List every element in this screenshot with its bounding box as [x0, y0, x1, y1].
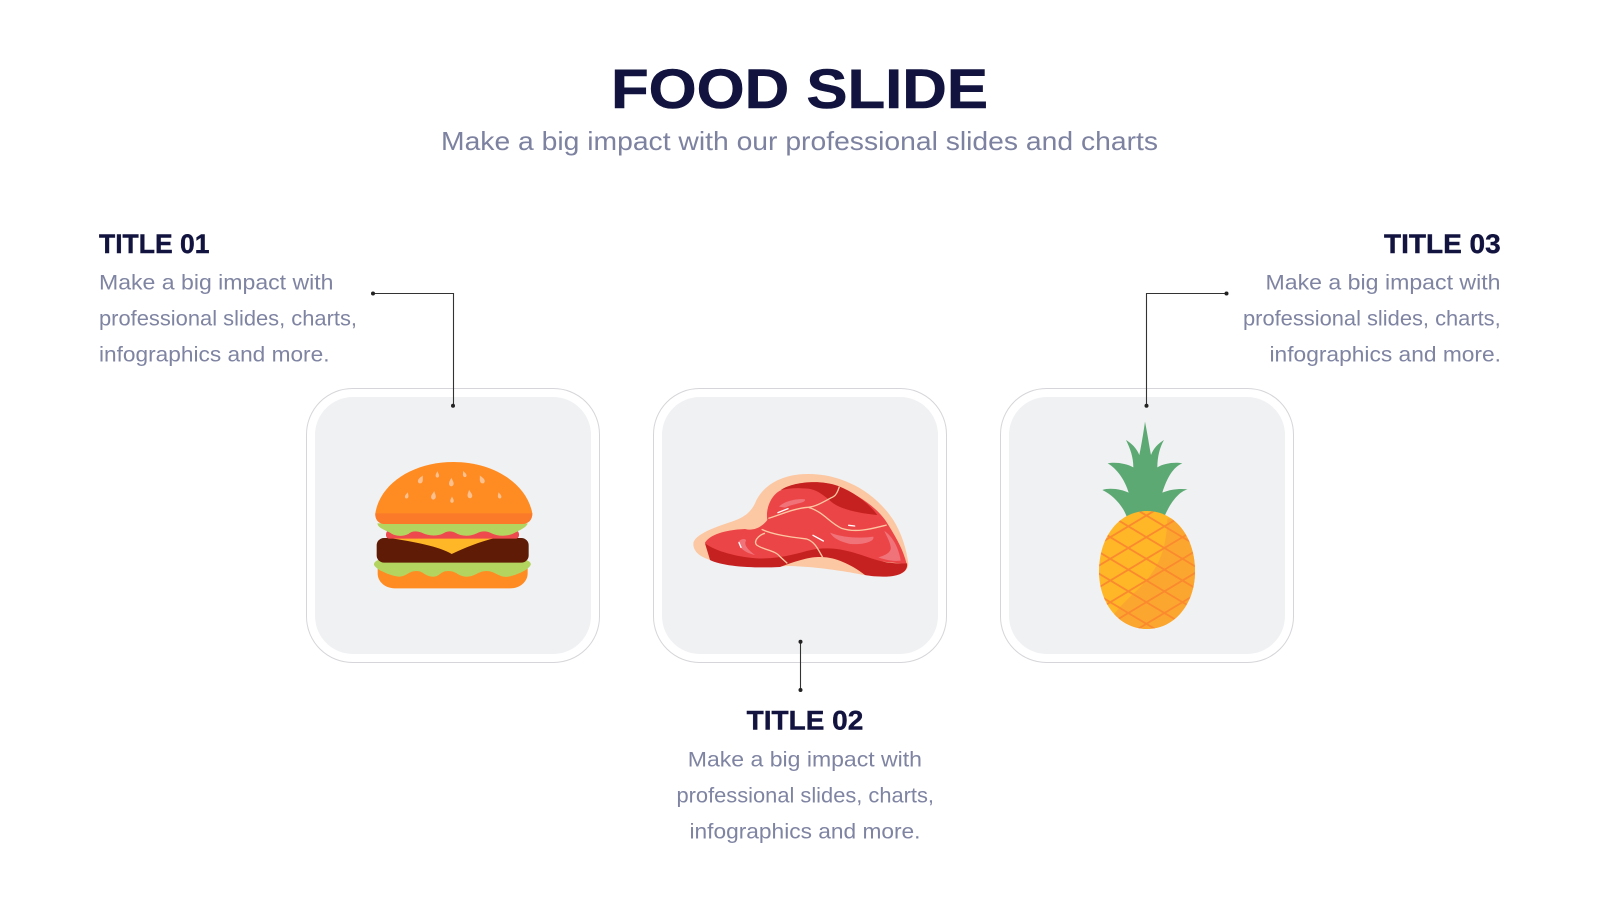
- panel: pineapple card: [1000, 388, 1294, 663]
- text block: title 01: infographics and more.: [99, 344, 330, 366]
- text block: title 02: TITLE 02: [747, 705, 863, 735]
- text block: title 03: TITLE 03: [1384, 229, 1501, 259]
- text block: title 01: professional slides, charts,: [99, 308, 357, 330]
- text block: title 03: Make a big impact with: [1266, 272, 1500, 294]
- text block: title 02: Make a big impact with: [688, 748, 922, 772]
- text block: title 02: professional slides, charts,: [676, 784, 934, 808]
- text block: title 03: professional slides, charts,: [1243, 308, 1501, 330]
- panel: meat card: [654, 388, 946, 662]
- text block: title 03: [1243, 229, 1501, 366]
- subtitle: Make a big impact with our professional slides and charts: [441, 126, 1158, 156]
- panel: burger card: [306, 388, 600, 662]
- text block: title 01: Make a big impact with: [99, 272, 334, 294]
- text block: title 02: [676, 705, 934, 844]
- connector: title 01 to burger: [371, 292, 455, 408]
- connector: title 02 to meat: [798, 640, 802, 692]
- icon: pineapple: [1099, 422, 1195, 629]
- text block: title 01: [99, 229, 357, 366]
- text block: title 03: infographics and more.: [1270, 344, 1501, 366]
- title: FOOD SLIDE: [611, 57, 988, 120]
- icon: steak: [693, 474, 908, 577]
- text block: title 01: TITLE 01: [99, 229, 210, 259]
- text block: title 02: infographics and more.: [690, 820, 920, 844]
- icon: burger: [374, 462, 532, 588]
- connector: title 03 to pineapple: [1144, 292, 1228, 408]
